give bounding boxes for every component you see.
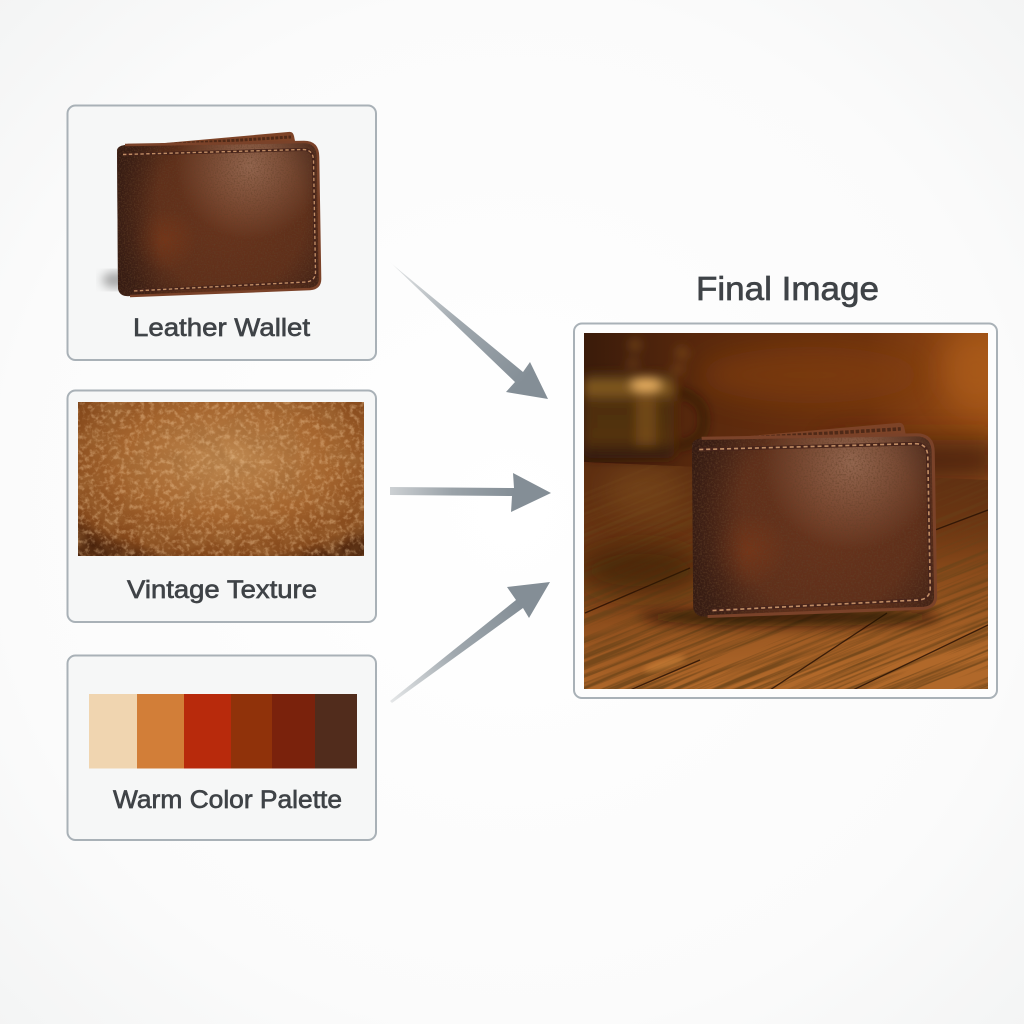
panel: leather wallet input xyxy=(68,106,376,360)
background wall xyxy=(584,333,988,493)
wallet shadow xyxy=(640,608,940,626)
blurred brass mug xyxy=(584,339,704,458)
image: leather wallet xyxy=(117,132,320,296)
label: vintage texture: Vintage Texture xyxy=(127,576,317,604)
heading: final image: Final Image xyxy=(696,270,879,307)
icon: wallet shadow xyxy=(102,272,130,288)
arrow: wallet to final xyxy=(390,262,548,399)
wallet xyxy=(692,423,936,617)
wooden table xyxy=(584,462,988,689)
arrow: palette to final xyxy=(390,582,550,703)
panel: vintage texture input xyxy=(68,390,376,622)
image: wallet on wooden table xyxy=(584,333,988,689)
label: leather wallet: Leather Wallet xyxy=(133,314,310,342)
label: warm color palette: Warm Color Palette xyxy=(113,786,342,814)
panel: warm color palette input xyxy=(68,656,376,840)
chart: color swatches xyxy=(89,694,357,768)
panel: final image xyxy=(573,322,998,699)
arrow: texture to final xyxy=(390,473,551,512)
image: vintage texture xyxy=(78,402,364,556)
